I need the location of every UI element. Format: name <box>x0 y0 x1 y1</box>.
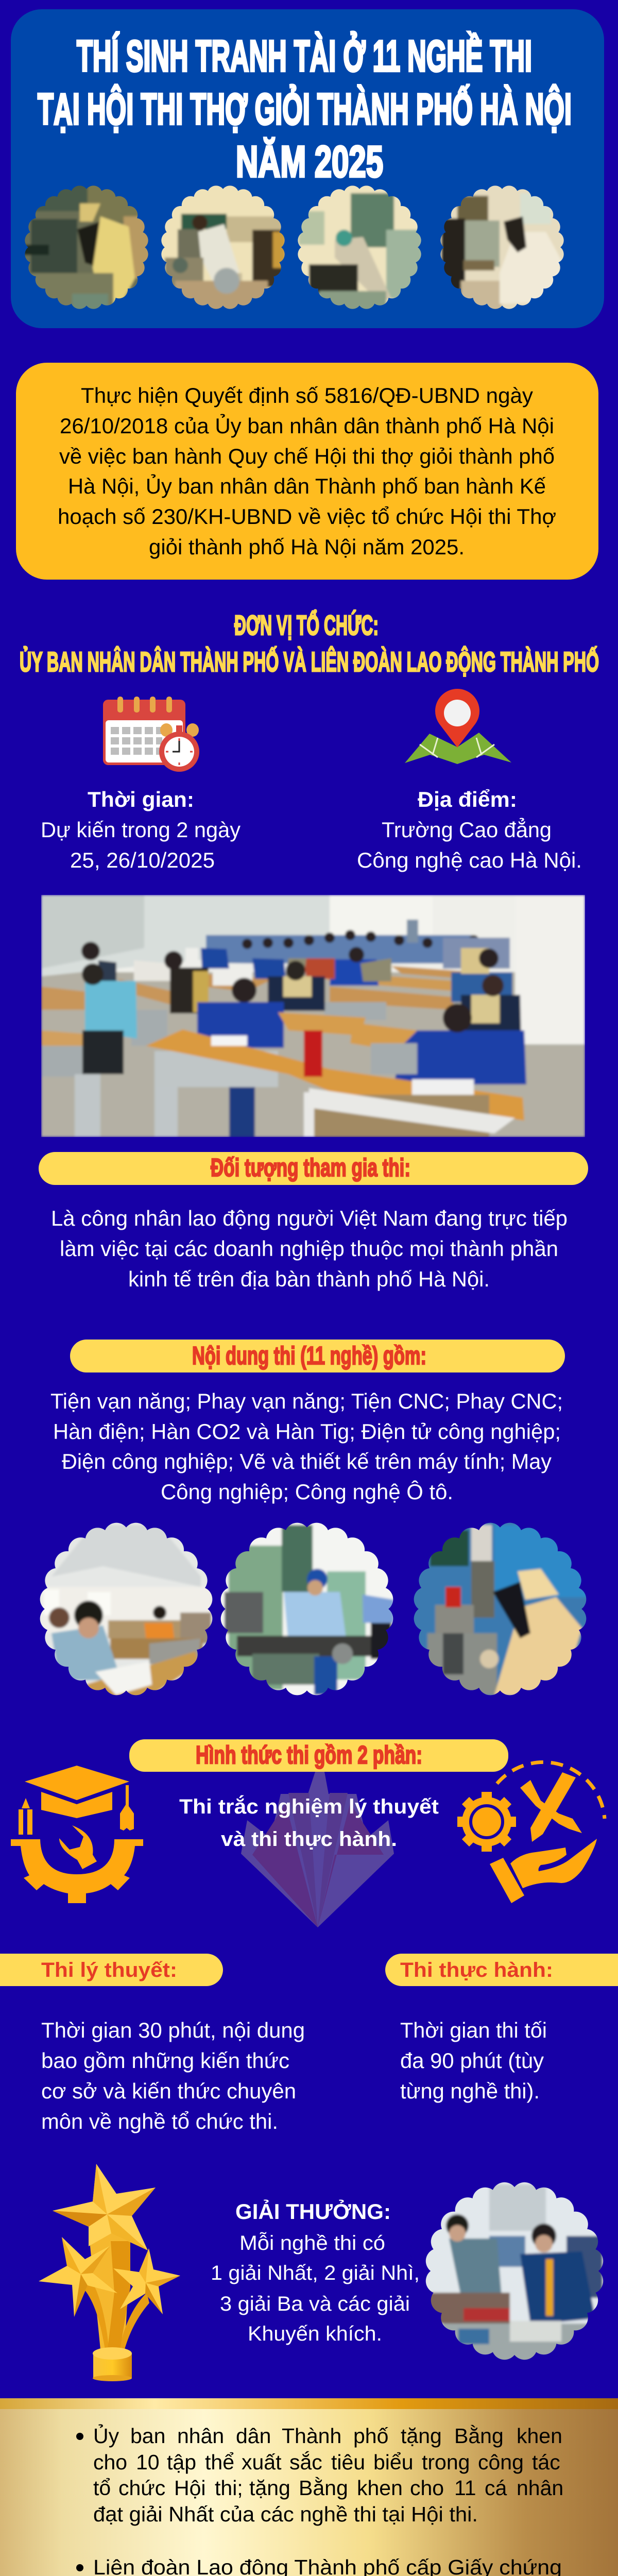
block: location: Công nghệ cao Hà Nội. <box>357 848 582 872</box>
photo: welder with helmet <box>409 1520 590 1700</box>
bullet: city award: biểu <box>373 2450 414 2474</box>
photo: machinist <box>298 185 421 309</box>
panel: awards <box>0 2409 618 2576</box>
icon: star trophy <box>39 2164 180 2381</box>
photo: electricians at work <box>422 2179 608 2365</box>
bullet: city award: Bằng <box>454 2424 504 2448</box>
bullet: city award: khen <box>357 2476 403 2500</box>
pill heading: participants: Đối tượng tham gia thi: <box>211 1154 410 1182</box>
bullet: city award: phố <box>353 2424 388 2448</box>
bullet: city award: tổ <box>93 2476 111 2500</box>
bullet: city award: Bằng <box>299 2476 348 2500</box>
photo: electrical workshop <box>161 185 285 309</box>
intro text: 26/10/2018 của Ủy ban nhân dân thành phố Hà Nội <box>60 413 554 438</box>
pill heading: practice: Thi thực hành: <box>400 1959 553 1981</box>
intro text: Hà Nội, Ủy ban nhân dân Thành phố ban hành Kế <box>68 473 546 498</box>
bullet: city award: 11 <box>454 2476 476 2500</box>
pill heading: exam format: Hình thức thi gồm 2 phần: <box>196 1741 422 1769</box>
bullet: city award: thi; <box>215 2476 243 2500</box>
icon: map pin <box>405 689 511 764</box>
text: prizes <box>211 2199 420 2345</box>
text: theory: Thời gian 30 phút, nội dung <box>41 2018 305 2042</box>
block: time <box>41 787 241 872</box>
bullet: city award: công <box>478 2450 524 2474</box>
bullet: city award: chức <box>118 2476 165 2500</box>
pill heading: practice <box>385 1954 618 1986</box>
pill heading: participants <box>39 1152 588 1185</box>
bullet: city award: Ủy <box>93 2424 119 2448</box>
pill heading: theory <box>0 1954 223 1986</box>
text: trades <box>50 1389 563 1504</box>
text: theory: môn về nghề tổ chức thi. <box>41 2109 278 2133</box>
text: participants: Là công nhân lao động người Việt Nam đang trực tiếp <box>51 1206 568 1230</box>
text: trades: Hàn điện; Hàn CO2 và Hàn Tig; Điện tử công nghiệp; <box>53 1419 561 1444</box>
text: trades: Công nghiệp; Công nghệ Ô tô. <box>161 1480 453 1504</box>
photo: women in exam <box>36 1520 216 1700</box>
text: prizes: Mỗi nghề thi có <box>239 2231 385 2255</box>
intro text: giỏi thành phố Hà Nội năm 2025. <box>149 535 465 559</box>
pill heading: theory: Thi lý thuyết: <box>41 1959 177 1981</box>
text: exam parts: Thi trắc nghiệm lý thuyết <box>179 1794 439 1818</box>
text: practice: đa 90 phút (tùy <box>400 2048 544 2073</box>
bullet: city award: tác <box>532 2450 560 2474</box>
heading: organisers <box>20 610 599 677</box>
intro text: hoạch số 230/KH-UBND về việc tổ chức Hội thi Thợ <box>58 504 556 529</box>
title: NĂM 2025 <box>236 138 383 187</box>
icon: graduation cap and gear <box>11 1766 143 1903</box>
intro text: về việc ban hành Quy chế Hội thi thợ giỏi thành phố <box>59 444 555 468</box>
photo: welder with mask <box>25 185 148 309</box>
photo: machinist in blue <box>216 1520 397 1700</box>
text: participants <box>51 1206 568 1291</box>
bullet: city award: nhân <box>517 2476 563 2500</box>
block: time: Dự kiến trong 2 ngày <box>41 818 241 842</box>
text: exam parts <box>179 1794 439 1851</box>
icon: hand with tools <box>457 1762 605 1903</box>
text: prizes: Khuyến khích. <box>248 2323 382 2345</box>
bullet: city award: thể <box>205 2450 234 2474</box>
bullet: city award: cho <box>93 2450 127 2474</box>
text: prizes: 1 giải Nhất, 2 giải Nhì, <box>211 2262 420 2284</box>
text: theory: cơ sở và kiến thức chuyên <box>41 2079 296 2103</box>
bullet: city award: trong <box>422 2450 470 2474</box>
block: location: Địa điểm: <box>418 787 517 811</box>
bullet: city award: dân <box>236 2424 271 2448</box>
bullet: city award: đạt giải Nhất của các nghề thi tại Hội thi. <box>93 2502 478 2526</box>
bullet: city award: tặng <box>249 2476 290 2500</box>
text: theory: bao gồm những kiến thức <box>41 2048 289 2073</box>
bullet: city award: Thành <box>282 2424 341 2448</box>
block: location <box>357 787 582 872</box>
bullet: city award: xuất <box>242 2450 282 2474</box>
bullet: city award: 10 <box>136 2450 160 2474</box>
bullet: city award: Hội <box>174 2476 206 2500</box>
pill heading: content: Nội dung thi (11 nghề) gồm: <box>192 1342 426 1370</box>
bullet: city award <box>76 2424 563 2526</box>
block: location: Trường Cao đẳng <box>382 817 552 842</box>
text: prizes: 3 giải Ba và các giải <box>220 2293 410 2315</box>
heading: organisers: ĐƠN VỊ TỔ CHỨC: <box>234 610 379 641</box>
text: prizes: GIẢI THƯỞNG: <box>235 2199 391 2224</box>
bullet: city award: cho <box>410 2476 444 2500</box>
bullet: city award: nhân <box>177 2424 224 2448</box>
text: practice <box>400 2018 547 2103</box>
text: participants: kinh tế trên địa bàn thành phố Hà Nội. <box>128 1267 490 1291</box>
block: time: 25, 26/10/2025 <box>70 848 215 872</box>
bullet: city award: tiêu <box>331 2450 365 2474</box>
bullet: city award: sắc <box>289 2450 322 2474</box>
photo: exam room <box>41 895 585 1137</box>
text: exam parts: và thi thực hành. <box>221 1828 397 1851</box>
gold divider band <box>0 2398 618 2409</box>
text: trades: Tiện vạn năng; Phay vạn năng; Tiện CNC; Phay CNC; <box>50 1389 563 1413</box>
title <box>38 31 572 187</box>
intro text <box>58 383 556 559</box>
pill heading: content <box>70 1340 565 1372</box>
bullet: city award: cá <box>485 2476 507 2500</box>
icon: calendar and clock <box>103 697 199 772</box>
bullet: city award: ban <box>130 2424 165 2448</box>
icon: purple star fan <box>241 1772 394 1927</box>
text: participants: làm việc tại các doanh nghiệp thuộc mọi thành phần <box>60 1236 558 1261</box>
text: trades: Điện công nghiệp; Vẽ và thiết kế trên máy tính; May <box>62 1449 552 1473</box>
photo: welder in white <box>438 183 566 312</box>
panel: header <box>11 9 604 328</box>
bullet: city award: tập <box>167 2450 196 2474</box>
text: theory <box>41 2018 305 2133</box>
block: time: Thời gian: <box>88 787 194 811</box>
text: practice: từng nghề thi). <box>400 2079 540 2103</box>
bullet: city award: khen <box>517 2424 562 2448</box>
text: practice: Thời gian thi tối <box>400 2018 547 2042</box>
panel: introduction <box>16 363 598 580</box>
intro text: Thực hiện Quyết định số 5816/QĐ-UBND ngày <box>81 383 533 408</box>
bullet: city award: tặng <box>401 2424 442 2448</box>
